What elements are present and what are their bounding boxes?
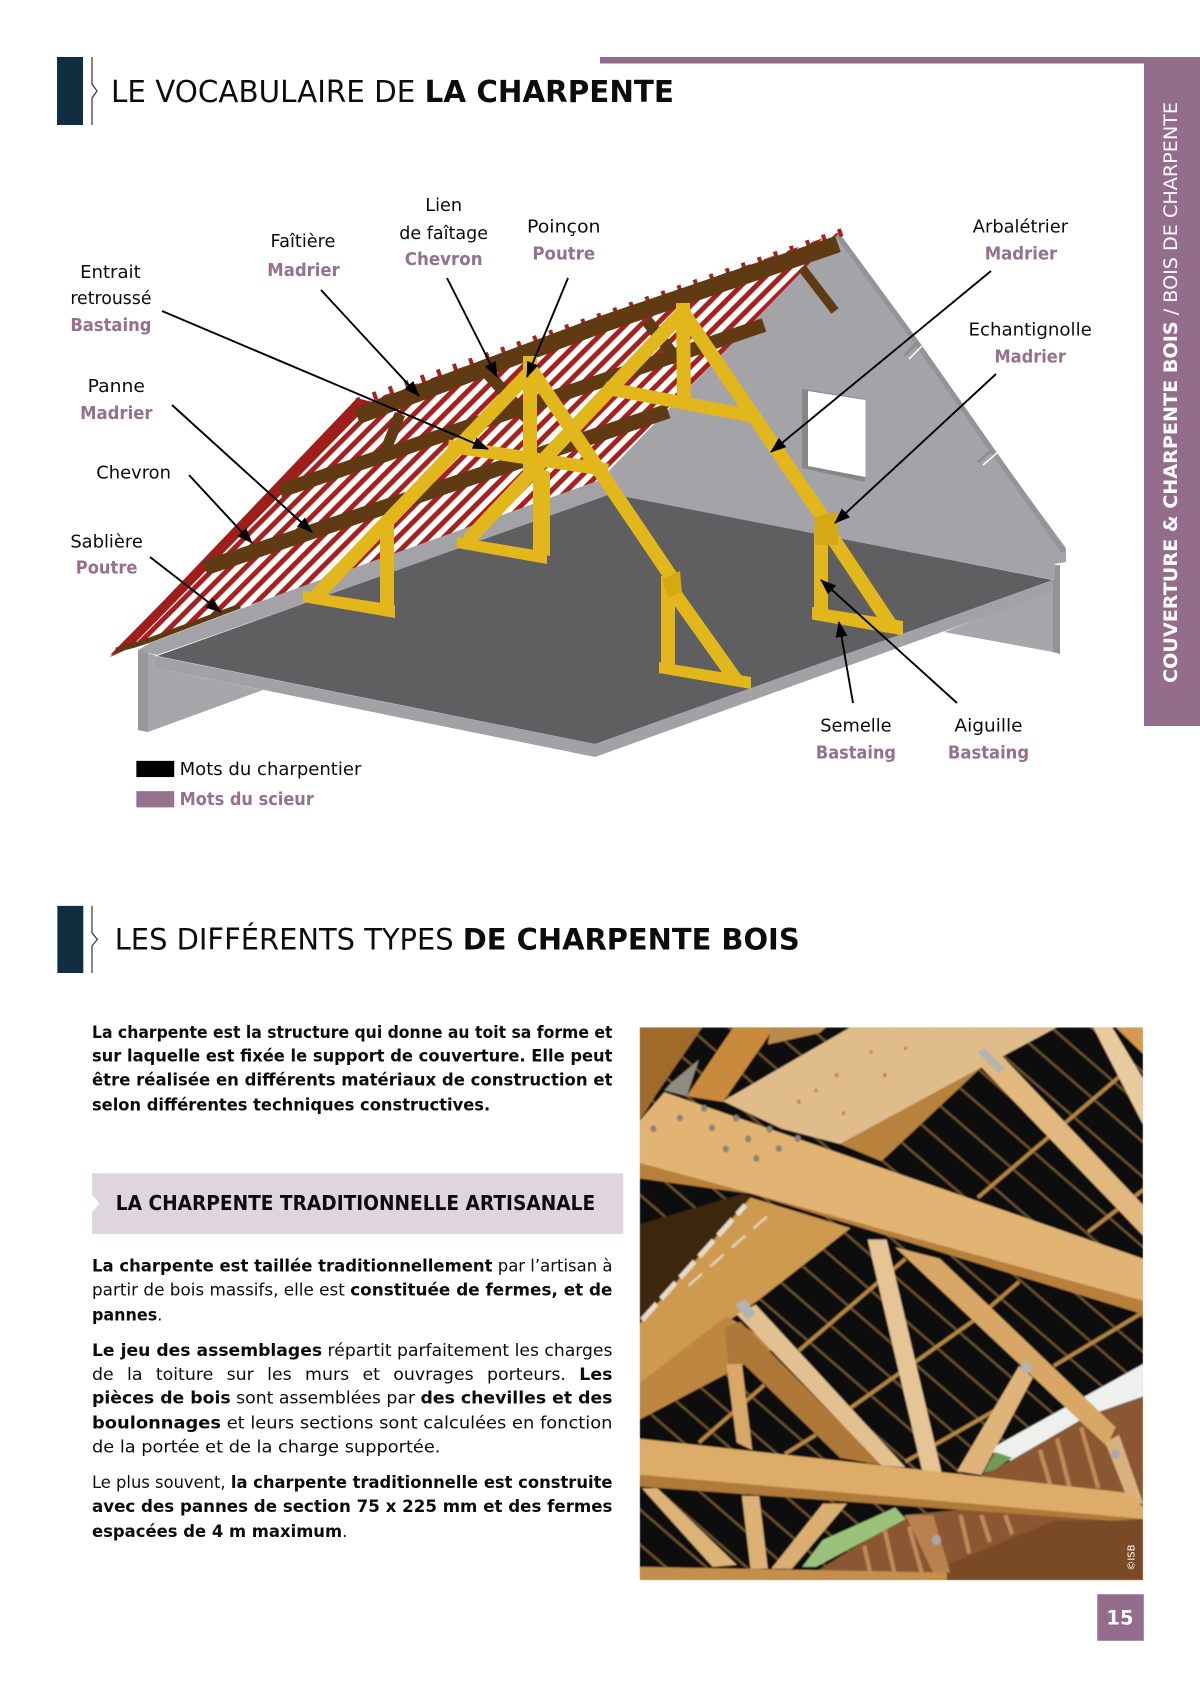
label: aiguille: Bastaing	[948, 744, 1029, 764]
paragraph 2: boulonnages et leurs sections sont calculées en fonction	[92, 1413, 612, 1433]
label: poincon: Poinçon	[527, 218, 601, 238]
label: echantignolle: Echantignolle	[968, 321, 1092, 341]
paragraph 2: de la toiture sur les murs et ouvrages porteurs. Les	[92, 1364, 612, 1384]
faitiere and pannes	[205, 244, 838, 568]
paragraph 3: avec des pannes de section 75 x 225 mm et des fermes	[92, 1496, 612, 1516]
subheading band	[92, 1173, 623, 1234]
label: lien de faitage: de faîtage	[399, 224, 488, 244]
label: echantignolle	[968, 321, 1092, 368]
heading: types de charpente	[57, 906, 800, 973]
diagram labels	[57, 196, 1144, 1641]
intro text	[92, 1022, 612, 1114]
label: arbaletrier: Madrier	[985, 245, 1058, 265]
page number: 15	[1106, 1607, 1134, 1630]
paragraph 3	[92, 1472, 612, 1541]
ridge tile teeth	[357, 229, 851, 402]
photo credit: ©ISB	[1127, 1544, 1138, 1571]
green strip	[802, 1508, 906, 1567]
upper right diagonal	[980, 1054, 1143, 1236]
left end wall	[138, 650, 263, 732]
gable window	[802, 389, 866, 482]
roof rafters	[110, 232, 840, 655]
paragraph 1: La charpente est taillée traditionnellement par l’artisan à	[92, 1256, 612, 1276]
dark roof with battens	[640, 1027, 1143, 1580]
label: entrait retrousse: Entrait	[80, 263, 141, 283]
paragraph 1: pannes.	[92, 1304, 162, 1324]
label: aiguille: Aiguille	[954, 717, 1023, 737]
heading: le vocabulaire: LE VOCABULAIRE DE LA CHARPENTE	[111, 75, 674, 110]
web members	[642, 1240, 1143, 1573]
label: faitiere	[267, 232, 340, 281]
paragraph 2: Le jeu des assemblages répartit parfaitement les charges	[92, 1340, 612, 1360]
heading: le vocabulaire	[57, 57, 674, 125]
label: arbaletrier: Arbalétrier	[973, 218, 1069, 238]
label: entrait retrousse: retroussé	[70, 289, 151, 309]
left dark beam and lower rafter	[640, 1194, 850, 1419]
bottom sill	[640, 1567, 947, 1580]
legend: Mots du scieur	[180, 790, 314, 810]
paragraph 3: Le plus souvent, la charpente traditionnelle est construite	[92, 1472, 612, 1492]
intro text: selon différentes techniques constructives.	[92, 1094, 490, 1114]
label: arbaletrier	[973, 218, 1069, 265]
upper left timbers	[640, 1027, 827, 1120]
label: panne	[80, 377, 153, 424]
right rafter	[895, 1247, 1116, 1446]
intro text: La charpente est la structure qui donne au toit sa forme et	[92, 1022, 612, 1042]
label: poincon	[527, 218, 601, 265]
label: lien de faitage	[399, 196, 488, 270]
top bar and side tab	[600, 57, 1200, 726]
label: entrait retrousse: Bastaing	[70, 316, 151, 336]
label: aiguille	[948, 717, 1029, 764]
label: panne: Panne	[88, 377, 145, 397]
subheading band: LA CHARPENTE TRADITIONNELLE ARTISANALE	[116, 1191, 595, 1215]
inner frame	[840, 1067, 981, 1161]
paragraph 1: partir de bois massifs, elle est constituée de fermes, et de	[92, 1280, 612, 1300]
truss B	[457, 303, 903, 636]
label: faitiere: Madrier	[267, 261, 340, 281]
arrows	[150, 271, 996, 703]
main beam	[640, 1092, 1143, 1314]
right lower wall	[944, 565, 1060, 654]
sabliere	[116, 606, 240, 650]
label: poincon: Poutre	[532, 245, 595, 265]
back wall	[802, 1397, 1143, 1580]
page number	[1097, 1594, 1144, 1641]
label: lien de faitage: Lien	[425, 196, 462, 216]
label: sabliere: Sablière	[70, 533, 143, 553]
paragraph 2	[92, 1340, 612, 1456]
label: sabliere	[70, 533, 143, 579]
long wall top band	[138, 470, 612, 655]
intro text: être réalisée en différents matériaux de construction et	[92, 1070, 612, 1090]
paragraph 2: de la portée et de la charge supportée.	[92, 1436, 440, 1456]
heading: types de charpente: LES DIFFÉRENTS TYPES DE CHARPENTE BOIS	[115, 923, 800, 957]
label: semelle	[816, 717, 896, 764]
label: semelle: Semelle	[820, 717, 892, 737]
legend	[136, 760, 362, 810]
far right top timber	[1093, 1027, 1143, 1125]
upper rafter	[723, 1027, 1057, 1144]
label: entrait retrousse	[70, 263, 151, 336]
label: faitiere: Faîtière	[271, 232, 335, 252]
wedge below rafter	[725, 1322, 883, 1465]
label: semelle: Bastaing	[816, 744, 896, 764]
roof red edge	[110, 398, 372, 657]
label: sabliere: Poutre	[76, 559, 137, 579]
paragraph 3: espacées de 4 m maximum.	[92, 1521, 347, 1541]
paragraph 1	[92, 1256, 612, 1324]
floor edge	[155, 580, 1053, 757]
paragraph 2: pièces de bois sont assemblées par des chevilles et des	[92, 1388, 612, 1408]
legend: Mots du charpentier	[180, 760, 362, 780]
truss A	[303, 356, 751, 689]
label: chevron: Chevron	[96, 463, 171, 483]
sky strip	[988, 1364, 1143, 1462]
bolts, knots and plates	[650, 1046, 1120, 1545]
label: echantignolle: Madrier	[994, 348, 1066, 368]
lower horizontal beam	[640, 1439, 1143, 1521]
diagram: roof structure	[110, 229, 1066, 757]
label: panne: Madrier	[80, 404, 153, 424]
floor	[157, 494, 1053, 744]
intro text: sur laquelle est fixée le support de couverture. Elle peut	[92, 1046, 612, 1066]
side tab label: COUVERTURE & CHARPENTE BOIS / BOIS DE CHARPENTE	[1161, 102, 1182, 683]
plywood panel	[947, 1519, 1143, 1580]
photo: wooden roof trusses	[640, 1027, 1143, 1580]
label: lien de faitage: Chevron	[405, 250, 483, 270]
gable wall	[590, 234, 1066, 580]
